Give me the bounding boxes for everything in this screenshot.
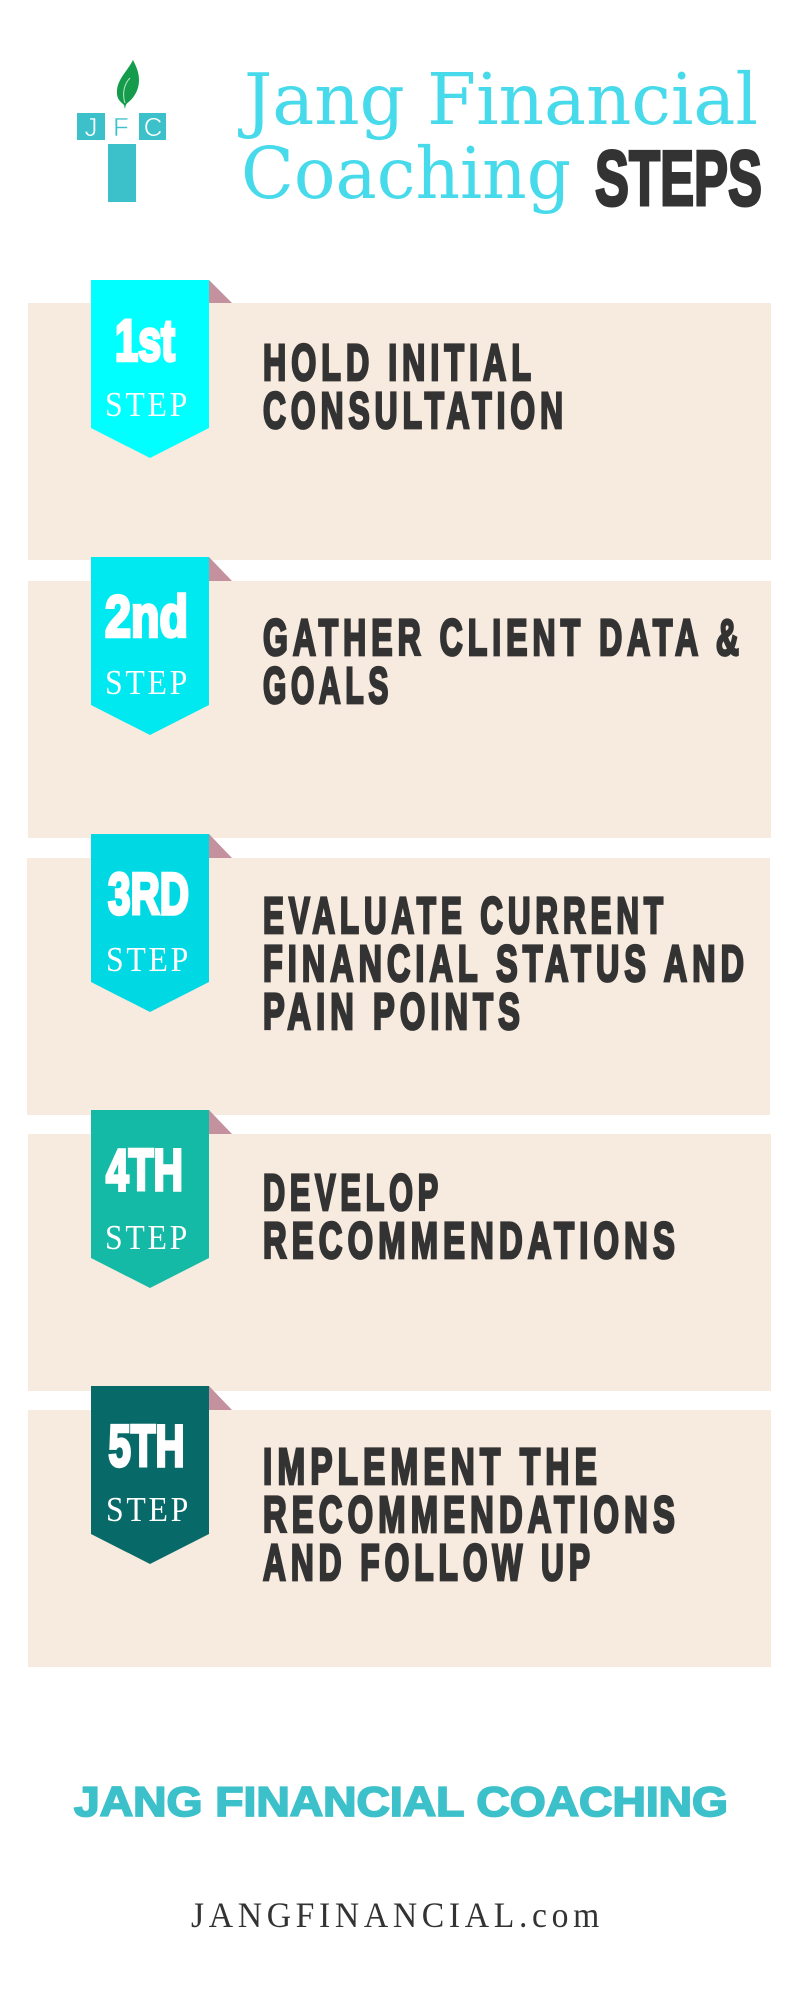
- step 1 heading: HOLD INITIAL: [263, 334, 536, 391]
- step 3 heading: PAIN POINTS: [263, 983, 525, 1040]
- ribbon fold: [209, 834, 232, 858]
- panel: step 5: [28, 1386, 771, 1667]
- step 4 heading: [263, 1164, 680, 1269]
- panel: step 4: [28, 1110, 771, 1391]
- step 3 heading: [263, 887, 749, 1040]
- ribbon: 5th step: 5TH: [108, 1414, 184, 1479]
- step 5 heading: [263, 1438, 680, 1591]
- icon: JFC logo: F: [113, 112, 129, 142]
- ribbon: 4th step: STEP: [105, 1218, 190, 1257]
- step 5 heading: AND FOLLOW UP: [263, 1534, 595, 1591]
- ribbon: 5th step: [91, 1386, 209, 1564]
- panel: step 3: [27, 834, 770, 1115]
- step 2 heading: GOALS: [263, 657, 393, 714]
- ribbon: 3rd step: STEP: [106, 940, 191, 979]
- step 1 heading: CONSULTATION: [263, 382, 568, 439]
- ribbon: 4th step: [91, 1110, 209, 1288]
- step 1 heading: [263, 334, 568, 439]
- icon: JFC logo: J: [84, 112, 98, 142]
- panel: step 2: [28, 557, 771, 838]
- ribbon: 3rd step: [91, 834, 209, 1012]
- ribbon: 1st step: [91, 280, 209, 458]
- ribbon: 5th step: STEP: [106, 1490, 191, 1529]
- panel: step 1: [28, 280, 771, 560]
- step 2 heading: [263, 609, 744, 714]
- ribbon: 1st step: 1st: [115, 308, 175, 374]
- ribbon: 4th step: 4TH: [106, 1138, 183, 1203]
- ribbon fold: [209, 557, 232, 581]
- title: Jang Financial: [238, 58, 758, 141]
- ribbon fold: [209, 1110, 232, 1134]
- icon: leaf: [117, 60, 139, 109]
- ribbon fold: [209, 280, 232, 303]
- ribbon: 2nd step: STEP: [105, 663, 190, 702]
- title: Coaching: [241, 132, 571, 215]
- title: [238, 58, 762, 222]
- icon: JFC logo: [77, 60, 166, 202]
- step 5 heading: IMPLEMENT THE: [263, 1438, 602, 1495]
- ribbon: 2nd step: 2nd: [105, 584, 188, 650]
- icon: JFC logo: C: [144, 112, 162, 142]
- ribbon: 2nd step: [91, 557, 209, 735]
- footer brand name: JANG FINANCIAL COACHING: [74, 1778, 728, 1825]
- step 4 heading: DEVELOP: [263, 1164, 443, 1221]
- ribbon: 1st step: STEP: [105, 385, 190, 424]
- ribbon fold: [209, 1386, 232, 1410]
- footer website: JANGFINANCIAL.com: [191, 1895, 604, 1935]
- ribbon: 3rd step: 3RD: [108, 862, 189, 927]
